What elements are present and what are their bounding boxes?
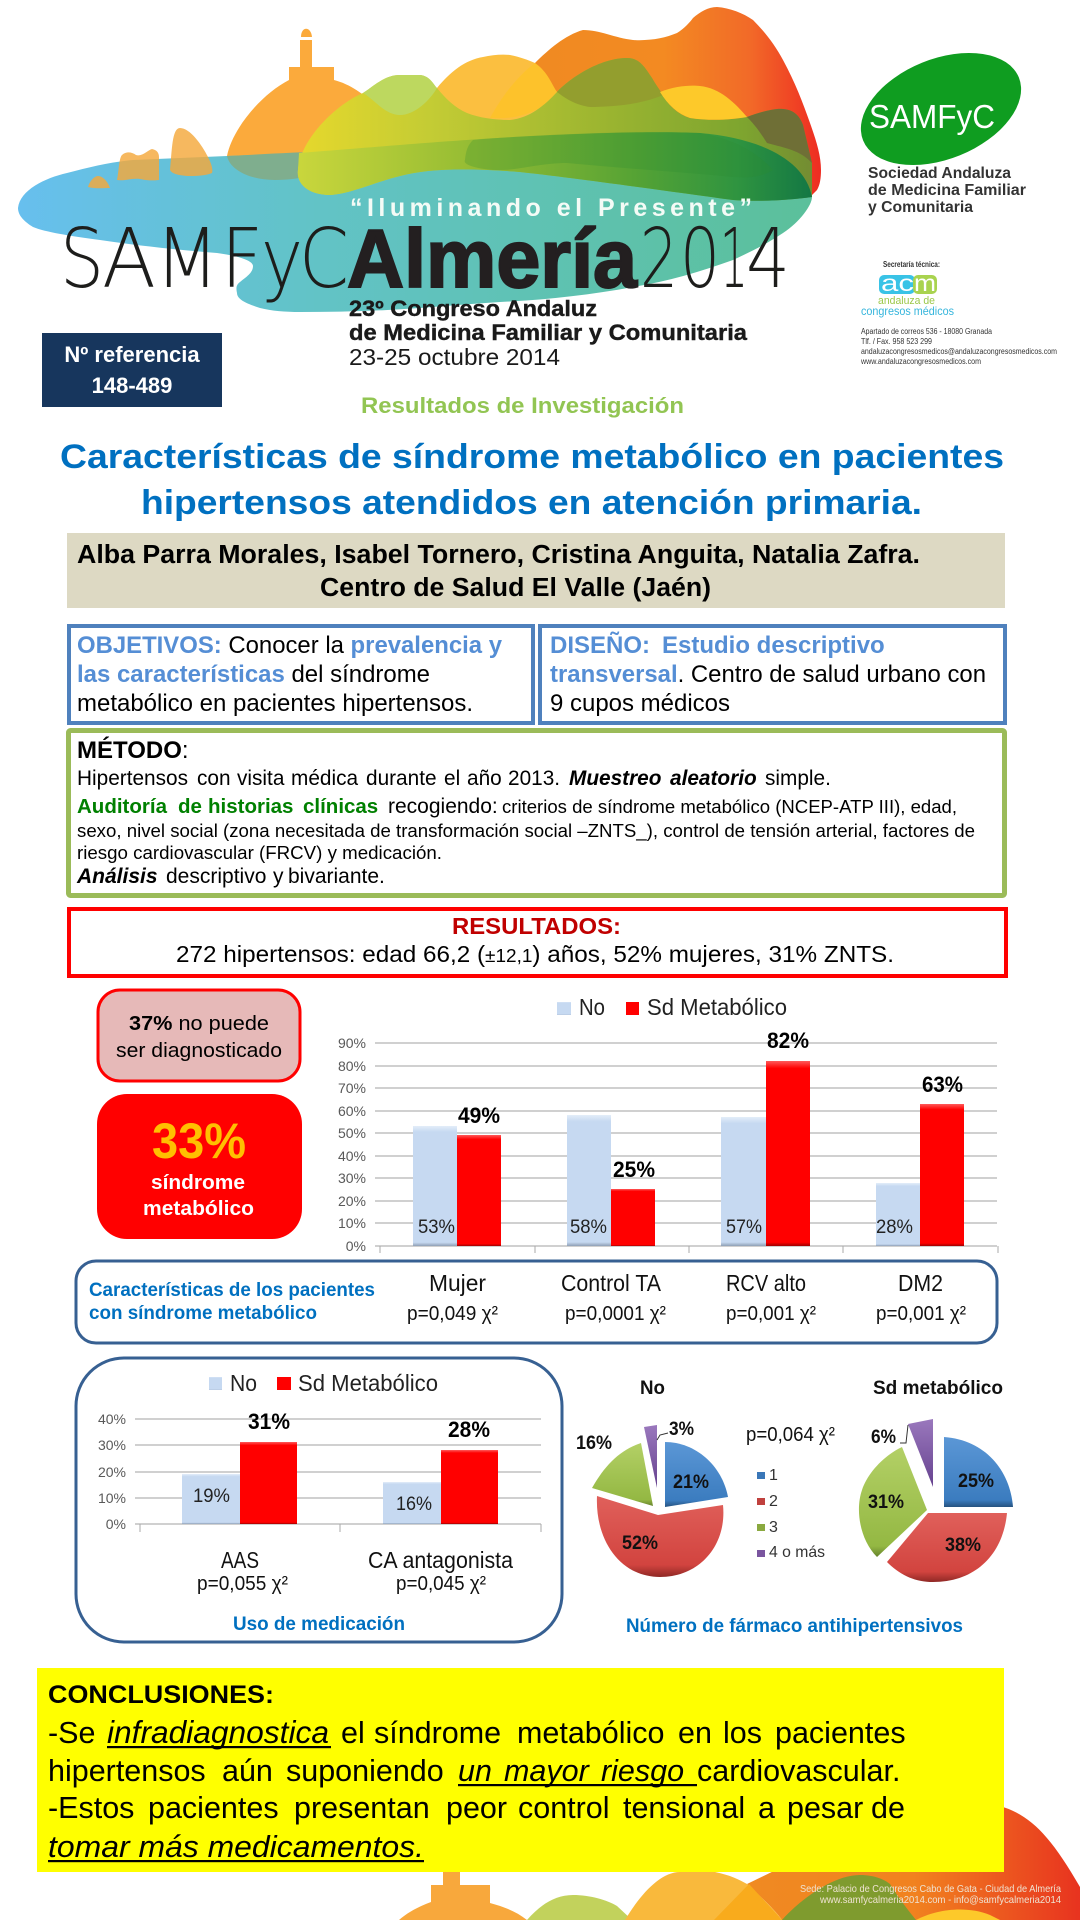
- panel: conclusiones: infradiagnostica: [107, 1714, 329, 1750]
- y axis labels: 0%: [346, 1238, 366, 1254]
- authors panel: [67, 533, 1005, 608]
- panel: uso de medicación: Uso de medicación: [233, 1614, 405, 1635]
- panel: conclusiones: -Estos: [48, 1791, 134, 1825]
- panel: conclusiones: tensional: [623, 1791, 745, 1825]
- panel: conclusiones: síndrome: [374, 1716, 501, 1750]
- bars: AAS: [182, 1409, 297, 1524]
- panel: conclusiones: aún: [222, 1754, 273, 1788]
- panel: uso de medicación: p=0,055 χ²: [197, 1573, 288, 1595]
- panel: método: clínicas: [303, 795, 378, 818]
- callout: no diagnosticado: 37% no puede: [129, 1013, 269, 1035]
- pie chart: Sd metabólico: 38%: [945, 1535, 981, 1556]
- congress wordmark: Almería: [347, 212, 638, 305]
- pie chart: Sd metabólico: 25%: [958, 1471, 994, 1492]
- panel: método: historias: [208, 795, 293, 818]
- pie chart: No: [576, 1378, 728, 1577]
- panel: resultados: [69, 909, 1006, 976]
- y axis labels: [338, 1035, 366, 1254]
- chart legend: No: [579, 994, 605, 1020]
- panel: conclusiones: pacientes: [775, 1716, 906, 1750]
- panel: objetivos: las características del síndrome: [77, 661, 430, 688]
- bars: CA antagonista: 28%: [448, 1417, 490, 1442]
- technical secretariat block: www.andaluzacongresosmedicos.com: [860, 357, 981, 366]
- medication y axis labels: 10%: [98, 1490, 126, 1506]
- pie chart: Sd metabólico: Sd metabólico: [873, 1378, 1003, 1399]
- congress wordmark: F: [221, 212, 263, 307]
- panel: método: Muestreo: [569, 767, 662, 790]
- bars: AAS: 19%: [193, 1486, 230, 1507]
- panel: método: aleatorio: [670, 767, 757, 790]
- SAMFyC society logo: y Comunitaria: [868, 199, 973, 216]
- panel: características de los pacientes: p=0,001 χ²: [726, 1303, 816, 1325]
- panel: conclusiones: un: [458, 1754, 492, 1788]
- panel: características de los pacientes: Características de los pacientes: [89, 1280, 375, 1301]
- technical secretariat block: Apartado de correos 536 - 18080 Granada: [861, 327, 992, 336]
- bars: Mujer: 49%: [458, 1103, 500, 1128]
- panel: resultados: 272 hipertensos: edad 66,2 ( ±12,1) años, 52% mujeres, 31% ZNTS.: [176, 941, 894, 967]
- panel: método: descriptivo: [166, 865, 266, 888]
- technical secretariat block: ac: [881, 270, 914, 296]
- congress subtitle and dates: 23º Congreso Andaluz: [349, 296, 597, 321]
- medication y axis labels: 0%: [106, 1516, 126, 1532]
- panel: método: 2013.: [508, 767, 560, 790]
- y axis labels: 60%: [338, 1103, 366, 1119]
- panel: uso de medicación: [76, 1358, 562, 1642]
- panel: conclusiones: tomar más medicamentos.: [48, 1830, 424, 1864]
- bottom decorative logo mark: [399, 1806, 1080, 1920]
- panel: método: Análisis: [76, 865, 158, 888]
- reference number badge: Nº referencia: [64, 342, 200, 367]
- panel: uso de medicación: p=0,045 χ²: [396, 1573, 486, 1595]
- panel: método: visita: [237, 767, 285, 790]
- panel: características de los pacientes: Control TA: [561, 1270, 662, 1296]
- y axis labels: 30%: [338, 1170, 366, 1186]
- pie chart: No: No: [640, 1378, 665, 1399]
- pie chart: Sd metabólico: 31%: [868, 1492, 904, 1513]
- medication y axis labels: [98, 1411, 126, 1532]
- pie legend and p value: 1: [769, 1467, 778, 1484]
- panel: método: durante: [366, 767, 437, 790]
- panel: método: criterios de síndrome metabólico (NCEP-ATP III), edad,: [502, 796, 957, 817]
- chart legend: Sd Metabólico: [647, 994, 787, 1020]
- bars: RCV alto: 57%: [726, 1217, 762, 1238]
- bars: AAS: 31%: [248, 1409, 290, 1434]
- congress wordmark: C: [299, 212, 349, 307]
- tagline: “Iluminando el Presente”: [350, 194, 752, 222]
- panel: conclusiones: en: [678, 1716, 712, 1750]
- panel: conclusiones: hipertensos: [48, 1754, 206, 1788]
- technical secretariat block: congresos médicos: [861, 304, 954, 318]
- panel: resultados: RESULTADOS:: [452, 913, 621, 939]
- pie chart: No: 3%: [669, 1419, 694, 1440]
- congress wordmark: A: [102, 212, 156, 307]
- congress wordmark: 1: [720, 212, 748, 307]
- y axis labels: 20%: [338, 1193, 366, 1209]
- panel: método: sexo, nivel social (zona necesitada de transformación social –ZNTS_), control de tensión arterial, factores de: [77, 820, 975, 842]
- y axis labels: 80%: [338, 1058, 366, 1074]
- panel: método: Auditoría: [77, 795, 168, 818]
- panel: método: médica: [291, 767, 358, 790]
- panel: diseño: Estudio descriptivo: [662, 632, 885, 659]
- technical secretariat block: andaluza de: [878, 295, 935, 307]
- technical secretariat block: Secretaría técnica:: [883, 260, 940, 269]
- y axis labels: 70%: [338, 1080, 366, 1096]
- callout: no diagnosticado: [98, 990, 300, 1081]
- title: hipertensos atendidos en atención primaria.: [141, 484, 922, 522]
- authors panel: Centro de Salud El Valle (Jaén): [320, 574, 711, 602]
- footer venue and contact: [800, 1883, 1061, 1906]
- pie chart: No: 16%: [576, 1433, 612, 1454]
- congress subtitle and dates: de Medicina Familiar y Comunitaria: [349, 320, 748, 345]
- bars: Mujer: [413, 1103, 501, 1246]
- panel: conclusiones: metabólico: [517, 1716, 664, 1750]
- y axis labels: 10%: [338, 1215, 366, 1231]
- bars: DM2: [876, 1072, 964, 1246]
- title: Características de síndrome metabólico en pacientes: [60, 438, 1004, 476]
- congress wordmark: 2: [640, 212, 678, 307]
- medication chart legend: Sd Metabólico: [298, 1370, 438, 1396]
- pie chart: Sd metabólico: [859, 1378, 1013, 1582]
- panel: conclusiones: el: [341, 1716, 365, 1750]
- technical secretariat block: [860, 260, 1057, 366]
- panel: diseño: [540, 626, 1005, 723]
- panel: conclusiones: pesar: [787, 1791, 863, 1825]
- reference number badge: 148-489: [92, 373, 172, 398]
- callout: 33% síndrome metabólico: 33%: [152, 1113, 246, 1169]
- panel: conclusiones: peor: [446, 1791, 507, 1825]
- panel: objetivos: OBJETIVOS: Conocer la prevalencia y: [77, 632, 503, 659]
- bars: Control TA: [567, 1115, 655, 1246]
- pie legend and p value: 2: [769, 1493, 778, 1510]
- panel: método: [68, 730, 1004, 896]
- congress wordmark: M: [155, 212, 219, 307]
- callout: 33% síndrome metabólico: [97, 1094, 302, 1239]
- congress subtitle and dates: 23-25 octubre 2014: [349, 344, 560, 370]
- panel: método: simple.: [765, 767, 831, 790]
- pie legend and p value: p=0,064 χ²: [746, 1424, 835, 1446]
- bars: Mujer: 53%: [418, 1217, 455, 1238]
- callout: 33% síndrome metabólico: metabólico: [143, 1198, 254, 1220]
- panel: diseño: DISEÑO:: [550, 632, 650, 659]
- panel: conclusiones: control: [518, 1791, 610, 1825]
- panel: características de los pacientes: p=0,049 χ²: [407, 1303, 498, 1325]
- y axis labels: 40%: [338, 1148, 366, 1164]
- pie chart: No: 21%: [673, 1472, 709, 1493]
- technical secretariat block: andaluzacongresosmedicos@andaluzacongresosmedicos.com: [861, 347, 1057, 356]
- panel: uso de medicación: AAS: [221, 1547, 259, 1573]
- chart legend: [557, 994, 787, 1020]
- pie chart: No: 52%: [622, 1533, 658, 1554]
- bars: Control TA: 58%: [570, 1217, 607, 1238]
- medication chart legend: No: [230, 1370, 257, 1396]
- bars: Control TA: 25%: [613, 1157, 655, 1182]
- panel: método: y: [273, 865, 284, 888]
- congress wordmark: S: [60, 212, 104, 307]
- panel: método: MÉTODO:: [77, 736, 189, 764]
- panel: conclusiones: pacientes: [148, 1791, 279, 1825]
- panel: método: de: [178, 795, 202, 818]
- top congress logo mark: [18, 7, 821, 312]
- callout: no diagnosticado: ser diagnosticado: [116, 1040, 282, 1062]
- bars: RCV alto: [721, 1028, 810, 1246]
- panel: conclusiones: cardiovascular.: [697, 1754, 900, 1788]
- callout: 33% síndrome metabólico: síndrome: [151, 1172, 245, 1194]
- panel: conclusiones: a: [758, 1791, 775, 1825]
- panel: características de los pacientes: [76, 1261, 997, 1343]
- congress wordmark: 0: [680, 212, 720, 307]
- panel: características de los pacientes: Mujer: [429, 1270, 486, 1296]
- panel: conclusiones: suponiendo: [286, 1754, 444, 1788]
- SAMFyC society logo: de Medicina Familiar: [868, 182, 1026, 199]
- category label: Resultados de Investigación: [361, 393, 684, 418]
- technical secretariat block: Tlf. / Fax. 958 523 299: [861, 337, 932, 346]
- authors panel: Alba Parra Morales, Isabel Tornero, Cristina Anguita, Natalia Zafra.: [77, 541, 920, 569]
- panel: características de los pacientes: p=0,0001 χ²: [565, 1303, 666, 1325]
- SAMFyC society logo: [844, 31, 1038, 216]
- panel: conclusiones: los: [723, 1716, 762, 1750]
- panel: diseño: 9 cupos médicos: [550, 690, 730, 717]
- panel: características de los pacientes: RCV alto: [726, 1270, 806, 1296]
- panel: método: Hipertensos: [77, 767, 188, 790]
- technical secretariat block: m: [914, 270, 936, 296]
- panel: objetivos: [69, 626, 533, 723]
- pie section caption: Número de fármaco antihipertensivos: [626, 1616, 963, 1637]
- panel: diseño: transversal. Centro de salud urbano con: [550, 661, 986, 688]
- panel: conclusiones: CONCLUSIONES:: [48, 1681, 274, 1709]
- panel: conclusiones: presentan: [294, 1791, 430, 1825]
- pie legend and p value: [746, 1424, 835, 1561]
- panel: método: riesgo cardiovascular (FRCV) y medicación.: [77, 842, 442, 863]
- panel: conclusiones: -Se: [48, 1716, 95, 1750]
- panel: conclusiones: [37, 1668, 1004, 1872]
- bar chart: características: [338, 994, 998, 1254]
- congress wordmark: [60, 212, 790, 307]
- bars: DM2: 28%: [876, 1217, 913, 1238]
- panel: método: recogiendo:: [388, 795, 498, 818]
- medication y axis labels: 30%: [98, 1437, 126, 1453]
- pie chart: Sd metabólico: 6%: [871, 1427, 896, 1448]
- SAMFyC society logo: SAMFyC: [869, 98, 995, 135]
- medication y axis labels: 20%: [98, 1464, 126, 1480]
- bars: RCV alto: 82%: [767, 1028, 809, 1053]
- panel: conclusiones: mayor: [504, 1754, 591, 1788]
- congress wordmark: y: [261, 212, 303, 307]
- reference number badge: [42, 333, 222, 407]
- pie legend and p value: 3: [769, 1519, 778, 1536]
- panel: características de los pacientes: p=0,001 χ²: [876, 1303, 966, 1325]
- medication chart legend: [209, 1370, 438, 1396]
- y axis labels: 50%: [338, 1125, 366, 1141]
- congress wordmark: 4: [746, 212, 790, 307]
- panel: uso de medicación: CA antagonista: [368, 1547, 513, 1573]
- panel: objetivos: metabólico en pacientes hipertensos.: [77, 690, 473, 717]
- pie legend and p value: 4 o más: [769, 1544, 825, 1561]
- panel: características de los pacientes: con síndrome metabólico: [89, 1303, 317, 1324]
- footer venue and contact: www.samfycalmeria2014.com - info@samfycalmeria2014: [819, 1894, 1061, 1906]
- panel: método: el: [444, 767, 460, 790]
- SAMFyC society logo: Sociedad Andaluza: [868, 165, 1011, 182]
- bars: CA antagonista: [383, 1417, 498, 1524]
- panel: método: con: [197, 767, 231, 790]
- y axis labels: 90%: [338, 1035, 366, 1051]
- panel: conclusiones: riesgo: [601, 1754, 684, 1788]
- panel: método: año: [467, 767, 502, 790]
- medication y axis labels: 40%: [98, 1411, 126, 1427]
- congress subtitle and dates: [349, 296, 748, 370]
- title: [60, 438, 1004, 522]
- bars: DM2: 63%: [922, 1072, 963, 1097]
- panel: método: bivariante.: [288, 865, 385, 888]
- panel: características de los pacientes: DM2: [898, 1270, 943, 1296]
- bars: CA antagonista: 16%: [396, 1494, 432, 1515]
- panel: conclusiones: de: [871, 1791, 905, 1825]
